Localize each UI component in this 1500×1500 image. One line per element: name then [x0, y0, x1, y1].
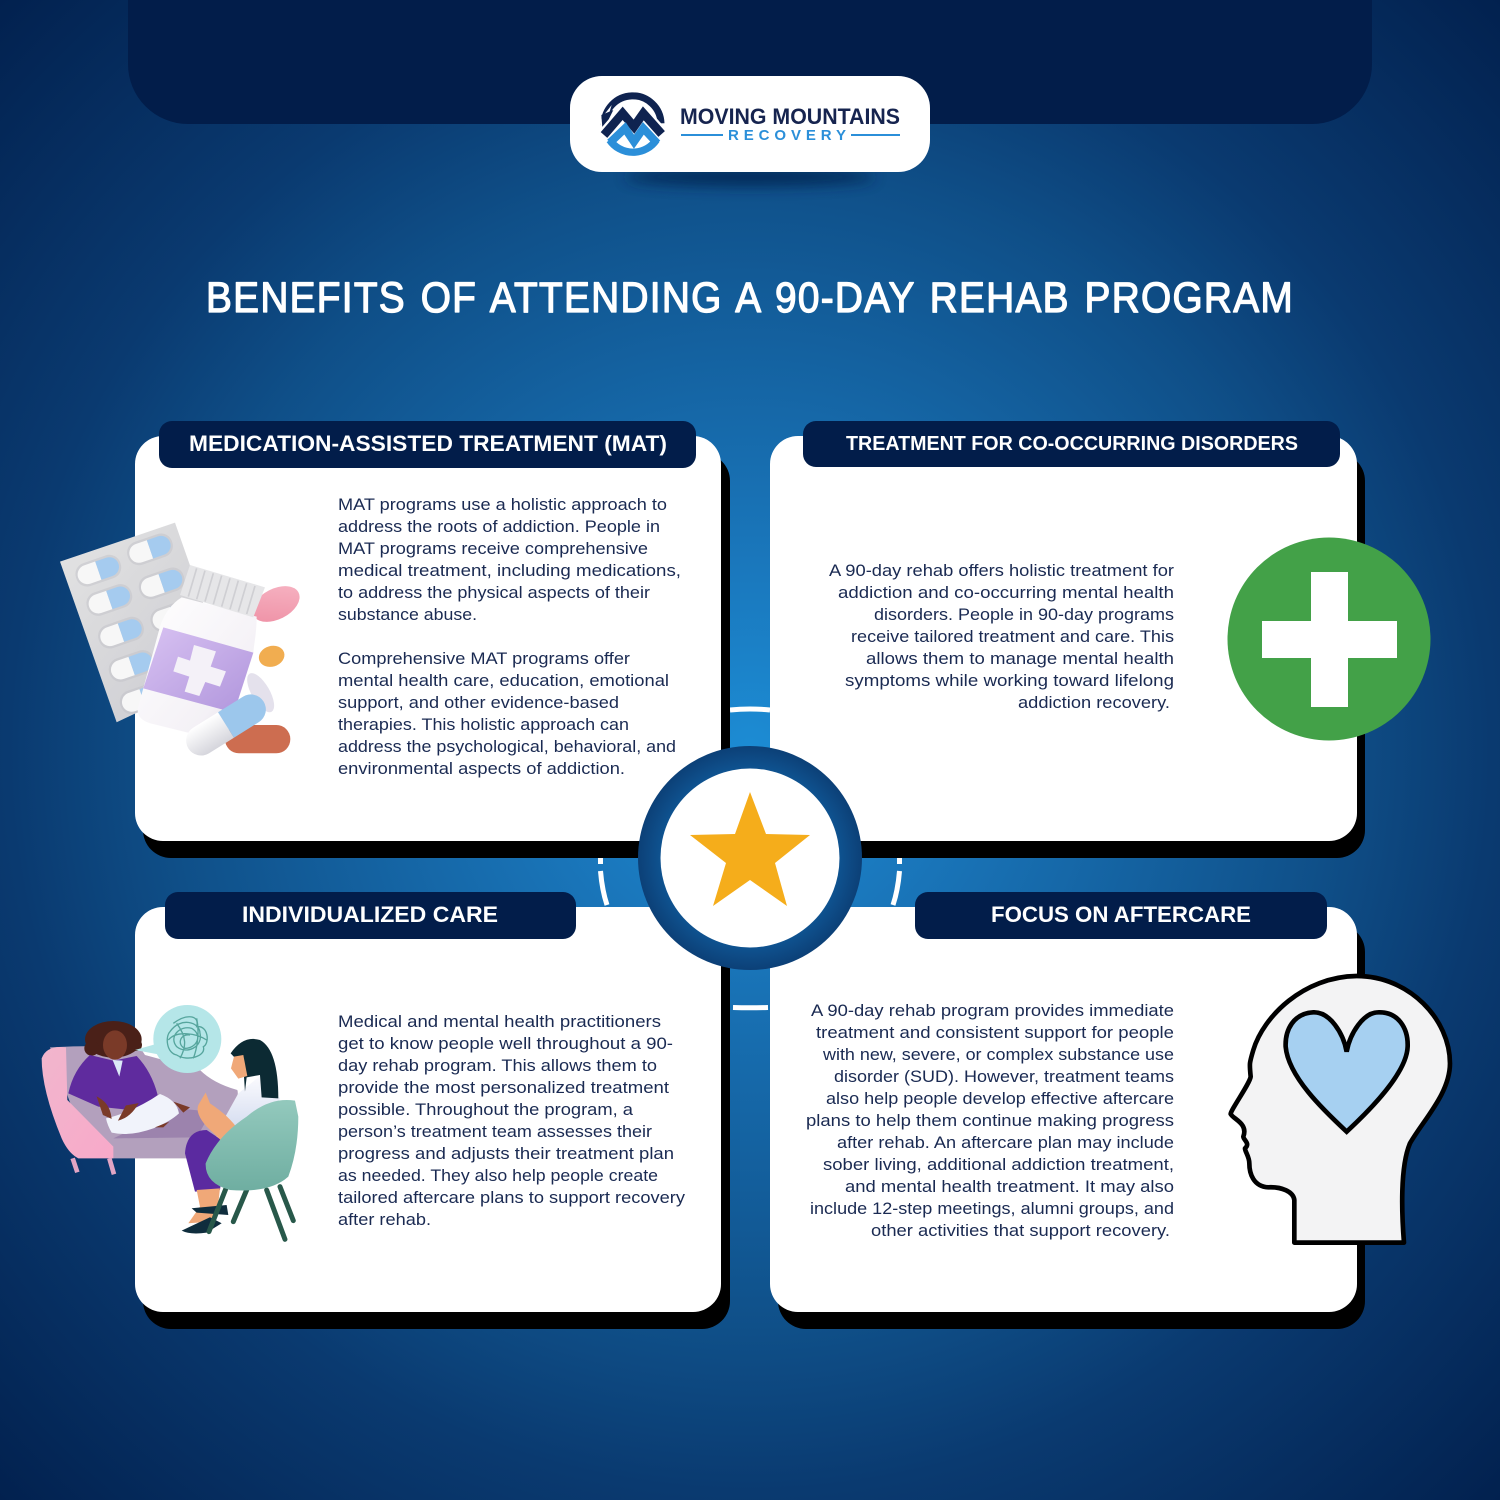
heading pill: MEDICATION-ASSISTED TREATMENT (MAT): [189, 431, 667, 456]
logo wordmark: [680, 104, 900, 144]
body text: MAT programs use a holistic approach to: [338, 496, 667, 514]
body text: after rehab. An aftercare plan may include: [837, 1134, 1174, 1152]
heading pill: [165, 892, 576, 939]
body text: [338, 496, 681, 778]
icon: star: [690, 792, 810, 906]
body text: A 90-day rehab program provides immediate: [811, 1002, 1174, 1020]
body text: Medical and mental health practitioners: [338, 1013, 661, 1031]
body text: progress and adjusts their treatment plan: [338, 1145, 674, 1163]
body text: other activities that support recovery.: [871, 1222, 1170, 1240]
body text: disorders. People in 90-day programs: [874, 606, 1174, 624]
heading pill: TREATMENT FOR CO-OCCURRING DISORDERS: [846, 433, 1298, 455]
panel: medication-assisted treatment: [60, 421, 730, 858]
body text: get to know people well throughout a 90-: [338, 1035, 673, 1053]
top header band: [128, 0, 1372, 124]
logo mark: [600, 96, 662, 152]
card shadow: [143, 924, 730, 1329]
body text: addiction recovery.: [1018, 694, 1170, 712]
body text: as needed. They also help people create: [338, 1167, 658, 1185]
body text: mental health care, education, emotional: [338, 672, 669, 690]
body text: [829, 562, 1175, 712]
icon: medication bottle and pills: [60, 523, 306, 761]
body text: possible. Throughout the program, a: [338, 1101, 634, 1119]
body text: address the psychological, behavioral, and: [338, 738, 676, 756]
body text: address the roots of addiction. People in: [338, 518, 660, 536]
body text: plans to help them continue making progress: [806, 1112, 1174, 1130]
card: [770, 436, 1357, 841]
heading pill: [803, 421, 1340, 467]
heading pill: INDIVIDUALIZED CARE: [242, 902, 498, 927]
body text: receive tailored treatment and care. This: [851, 628, 1174, 646]
body text: MAT programs receive comprehensive: [338, 540, 648, 558]
card shadow: [778, 924, 1365, 1329]
icon: green medical cross: [1228, 538, 1430, 740]
heading pill: [159, 421, 696, 468]
logo wordmark: MOVING MOUNTAINS: [680, 104, 900, 129]
logo card: [570, 76, 930, 172]
body text: addiction and co-occurring mental health: [838, 584, 1174, 602]
body text: Comprehensive MAT programs offer: [338, 650, 631, 668]
body text: support, and other evidence-based: [338, 694, 619, 712]
icon: therapy session illustration: [42, 1005, 298, 1239]
body text: and mental health treatment. It may also: [845, 1178, 1174, 1196]
logo wordmark: RECOVERY: [728, 127, 846, 144]
body text: to address the physical aspects of their: [338, 584, 651, 602]
card: [135, 907, 721, 1312]
body text: tailored aftercare plans to support recovery: [338, 1189, 686, 1207]
heading pill: FOCUS ON AFTERCARE: [991, 902, 1251, 927]
body text: disorder (SUD). However, treatment teams: [834, 1068, 1174, 1086]
body text: after rehab.: [338, 1211, 431, 1229]
panel: treatment for co-occurring disorders: [770, 421, 1430, 858]
body text: with new, severe, or complex substance use: [822, 1046, 1174, 1064]
body text: therapies. This holistic approach can: [338, 716, 629, 734]
title: BENEFITS OF ATTENDING A 90-DAY REHAB PROGRAM: [206, 274, 1294, 322]
body text: include 12-step meetings, alumni groups, and: [810, 1200, 1174, 1218]
body text: symptoms while working toward lifelong: [845, 672, 1174, 690]
panel: focus on aftercare: [770, 892, 1450, 1329]
card shadow: [778, 453, 1365, 858]
body text: also help people develop effective aftercare: [826, 1090, 1174, 1108]
dashed ring around centre: [600, 709, 900, 1008]
body text: substance abuse.: [338, 606, 477, 624]
body text: provide the most personalized treatment: [338, 1079, 669, 1097]
body text: sober living, additional addiction treatment,: [823, 1156, 1174, 1174]
icon: head with heart: [1231, 976, 1450, 1243]
card shadow: [143, 453, 730, 858]
card: [135, 436, 721, 841]
panel: individualized care: [42, 892, 730, 1329]
body text: medical treatment, including medications,: [338, 562, 681, 580]
body text: environmental aspects of addiction.: [338, 760, 625, 778]
body text: day rehab program. This allows them to: [338, 1057, 657, 1075]
body text: treatment and consistent support for people: [816, 1024, 1174, 1042]
body text: allows them to manage mental health: [866, 650, 1174, 668]
body text: person’s treatment team assesses their: [338, 1123, 653, 1141]
centre star badge: [638, 746, 862, 970]
body text: [806, 1002, 1174, 1240]
card: [770, 907, 1357, 1312]
body text: [338, 1013, 686, 1229]
body text: A 90-day rehab offers holistic treatment for: [829, 562, 1175, 580]
heading pill: [915, 892, 1327, 939]
logo shadow: [625, 168, 875, 186]
